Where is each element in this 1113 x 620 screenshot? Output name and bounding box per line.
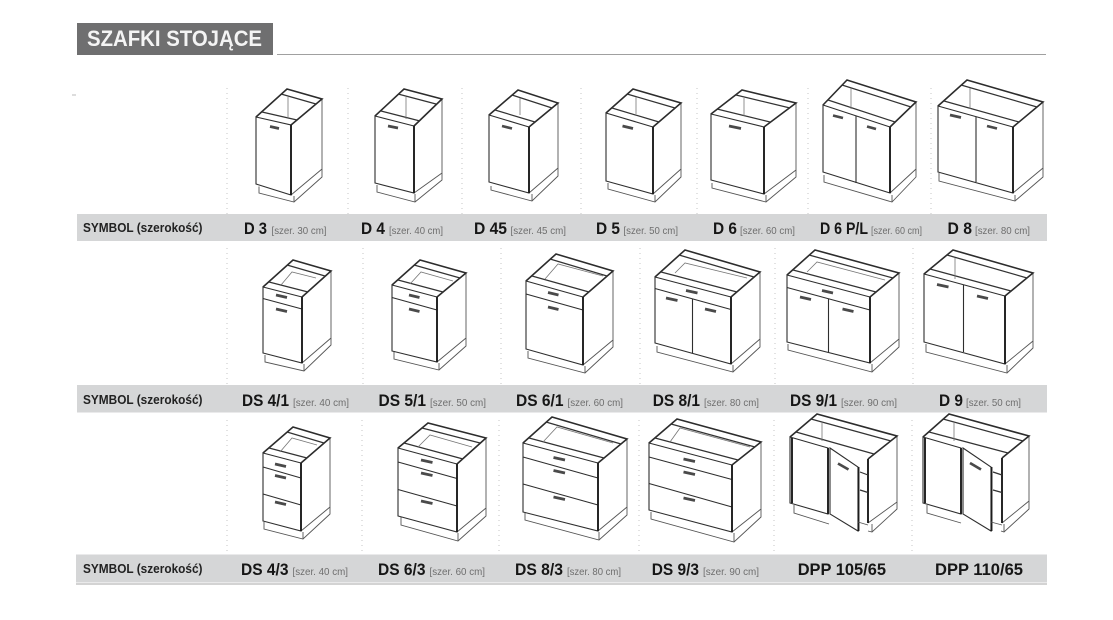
cabinet D 9 — [924, 250, 1033, 373]
label DS 9/1: DS 9/1 — [790, 391, 837, 410]
title banner: SZAFKI STOJĄCE — [87, 26, 262, 51]
label D 5 — [596, 219, 678, 238]
label DS 4/1 — [242, 391, 349, 410]
label D 6 — [713, 219, 795, 238]
label DPP 110/65: DPP 110/65 — [935, 560, 1023, 579]
cabinet DS 9/1 — [787, 250, 899, 372]
label DS 9/3 — [652, 560, 759, 579]
label D 6: D 6 — [713, 219, 737, 238]
label D 45: [szer. 45 cm] — [510, 225, 566, 237]
label D 3: D 3 — [244, 219, 267, 238]
label DS 6/1: DS 6/1 — [516, 391, 564, 410]
row 3: cabinets with drawers and corner cabinets — [263, 414, 1029, 542]
cabinet D 6 P/L — [823, 80, 916, 202]
label DS 6/3: [szer. 60 cm] — [430, 566, 485, 578]
label DS 8/3: [szer. 80 cm] — [567, 566, 621, 578]
row heading: SYMBOL (szerokość) — [83, 393, 202, 407]
label D 4: [szer. 40 cm] — [389, 225, 443, 237]
label DS 8/1: [szer. 80 cm] — [704, 397, 759, 409]
cabinet D 4 — [375, 89, 442, 202]
label DS 4/1: [szer. 40 cm] — [293, 397, 349, 409]
row 1: cabinets with doors — [256, 80, 1043, 202]
label DS 8/1: DS 8/1 — [653, 391, 700, 410]
label DS 5/1: DS 5/1 — [378, 391, 426, 410]
cabinet DS 9/3 — [649, 419, 761, 542]
cabinet DS 6/3 — [398, 423, 486, 541]
label D 3: [szer. 30 cm] — [272, 225, 327, 237]
label DS 9/3: [szer. 90 cm] — [703, 566, 759, 578]
label DS 5/1: [szer. 50 cm] — [430, 397, 486, 409]
label DS 8/3 — [515, 560, 621, 579]
cabinet D 45 — [489, 90, 558, 201]
label D 6 P/L — [820, 219, 922, 238]
label DS 5/1 — [378, 391, 486, 410]
cabinet DS 4/3 — [263, 427, 330, 539]
cabinet DPP 110/65 with open door — [923, 414, 1029, 532]
label DS 4/1: DS 4/1 — [242, 391, 289, 410]
label DS 9/3: DS 9/3 — [652, 560, 699, 579]
label DS 4/3: [szer. 40 cm] — [292, 566, 348, 578]
label DS 8/1 — [653, 391, 759, 410]
label D 9 — [939, 391, 1021, 410]
row 2: cabinets with drawer and doors — [263, 250, 1033, 373]
label D 8: [szer. 80 cm] — [975, 225, 1030, 237]
label D 45 — [474, 219, 566, 238]
label D 45: D 45 — [474, 219, 507, 238]
label D 8: D 8 — [948, 219, 972, 238]
label D 9: D 9 — [939, 391, 963, 410]
label D 9: [szer. 50 cm] — [966, 397, 1021, 409]
label DS 4/3: DS 4/3 — [241, 560, 288, 579]
label DPP 105/65: DPP 105/65 — [798, 560, 886, 579]
cabinet DS 5/1 — [392, 260, 466, 370]
label D 6 P/L: [szer. 60 cm] — [871, 225, 922, 237]
label DS 9/1 — [790, 391, 897, 410]
cabinet D 8 — [938, 80, 1043, 201]
cabinet DPP 105/65 with open door — [790, 414, 897, 532]
label DS 6/1 — [516, 391, 623, 410]
row heading: SYMBOL (szerokość) — [83, 562, 202, 576]
label D 6: [szer. 60 cm] — [740, 225, 795, 237]
cabinet DS 4/1 — [263, 260, 331, 371]
label D 5: D 5 — [596, 219, 620, 238]
label DS 4/3 — [241, 560, 348, 579]
label D 3 — [244, 219, 327, 238]
label bar row 2 — [77, 385, 1047, 412]
cabinet DS 6/1 — [526, 254, 613, 373]
label DS 6/3 — [378, 560, 485, 579]
label DS 8/3: DS 8/3 — [515, 560, 563, 579]
label DS 6/3: DS 6/3 — [378, 560, 426, 579]
cabinet D 6 — [711, 90, 796, 202]
label D 8 — [948, 219, 1030, 238]
cabinet D 3 — [256, 89, 322, 202]
cabinet DS 8/1 — [655, 250, 760, 372]
label D 4: D 4 — [361, 219, 385, 238]
cabinet DS 8/3 — [523, 417, 627, 540]
label DS 9/1: [szer. 90 cm] — [841, 397, 897, 409]
label D 6 P/L: D 6 P/L — [820, 219, 868, 238]
row heading: SYMBOL (szerokość) — [83, 221, 202, 235]
label D 5: [szer. 50 cm] — [624, 225, 678, 237]
label bar row 1 — [77, 214, 1047, 241]
label D 4 — [361, 219, 443, 238]
cabinet D 5 — [606, 89, 681, 202]
label bar row 3 — [76, 554, 1047, 584]
label DS 6/1: [szer. 60 cm] — [568, 397, 623, 409]
